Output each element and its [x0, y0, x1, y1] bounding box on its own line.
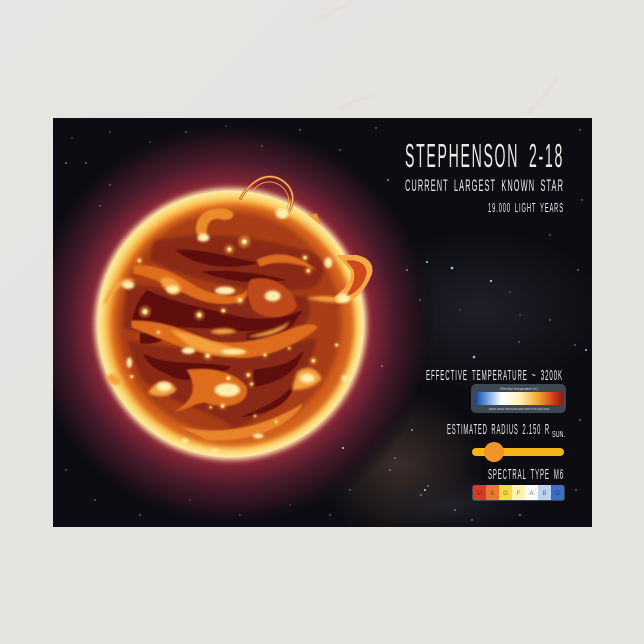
slider knob	[484, 442, 504, 462]
postcard infographic	[53, 118, 592, 527]
prominence: right flare	[334, 255, 372, 303]
spectral class strip	[472, 485, 565, 501]
spectral class strip: M	[477, 491, 482, 497]
red stellar glow	[53, 130, 420, 518]
glowing embers	[129, 236, 339, 425]
star field	[65, 125, 587, 521]
stat: effective temperature	[426, 367, 566, 413]
spectral class strip: B	[542, 491, 547, 497]
photosphere disc	[97, 191, 364, 457]
spectral class strip: G	[503, 491, 508, 497]
surface bands	[103, 208, 350, 440]
temperature gradient bar	[475, 392, 563, 405]
spectral class strip: A	[529, 491, 534, 497]
inner rim ring	[112, 205, 353, 446]
pale flame streaks	[103, 277, 350, 396]
heading block	[405, 137, 564, 215]
stat: estimated radius	[447, 421, 565, 462]
star: Stephenson 2-18 illustration	[95, 177, 372, 460]
mid-tone flows	[123, 235, 323, 428]
temperature scale caption: Effective temperature (K)	[500, 387, 538, 391]
inner reddish surface	[118, 211, 342, 434]
temperature scale ticks: 30000 10000 7500 6000 5200 4500 3700 3200 2400	[489, 407, 550, 411]
bright flare cores	[122, 208, 350, 452]
light orange flows	[132, 208, 317, 440]
prominence: top arc	[241, 177, 293, 215]
outer soft rim	[95, 188, 367, 460]
spectral class strip: K	[490, 491, 495, 497]
panel: space card	[53, 118, 592, 527]
temperature scale panel	[471, 384, 566, 413]
right shoulder bump	[303, 213, 357, 303]
spectral class strip: O	[555, 491, 560, 497]
solar subscript: SUN.	[552, 430, 565, 439]
slider track	[472, 448, 564, 456]
dark red bands	[132, 250, 304, 417]
stat: spectral type	[472, 467, 565, 501]
milky way haze	[340, 261, 560, 527]
spectral class strip: F	[517, 491, 521, 497]
